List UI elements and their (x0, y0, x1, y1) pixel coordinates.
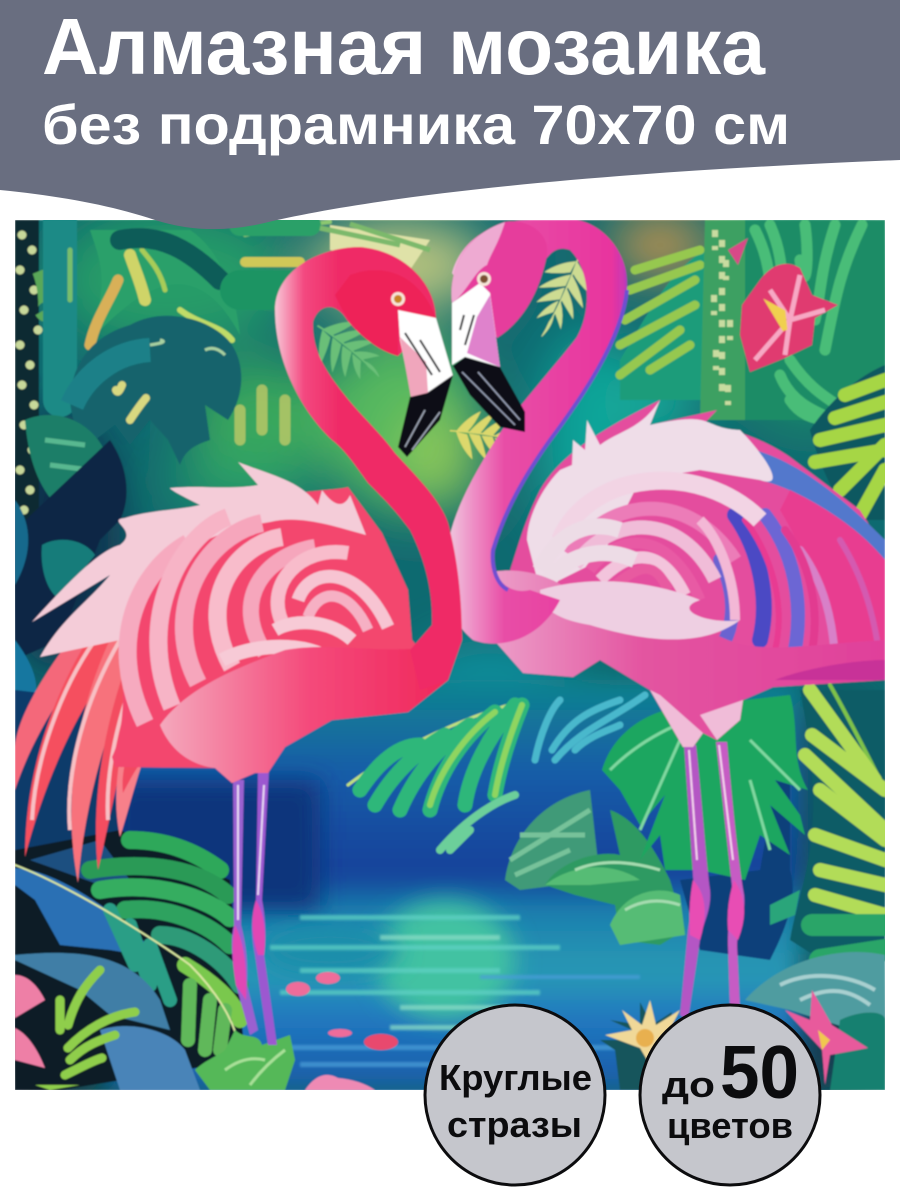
lower left body (160, 640, 462, 783)
right neck (446, 220, 627, 644)
badge: up to 50 colours: 50 (720, 1030, 799, 1114)
left head (335, 270, 436, 356)
mid fronds between necks (316, 258, 588, 460)
badge: up to 50 colours (640, 1005, 820, 1185)
big monstera behind right legs (602, 695, 808, 880)
lime palm, lower right (769, 682, 885, 962)
painting: flamingos in a jungle (0, 210, 900, 1110)
pink flower, bottom right (785, 990, 868, 1085)
top right foliage (620, 220, 885, 520)
purple tail feathers (720, 515, 880, 670)
left flamingo neck and head (275, 247, 462, 690)
centre palm frond (348, 700, 525, 850)
right wing arcs (540, 481, 760, 620)
lower centre leaves (505, 790, 685, 945)
right flamingo legs (680, 742, 744, 1020)
hanging bead vine, left (15, 220, 44, 520)
badge: round rhinestones (425, 1005, 605, 1185)
dark jungle patch, right (680, 780, 793, 960)
blue upper band (755, 450, 885, 560)
wing base (112, 487, 448, 783)
badge: round rhinestones: Круглые (439, 1057, 592, 1098)
left wing arcs (128, 517, 388, 723)
left flamingo tail feathers (15, 640, 142, 884)
title: second line: без подрамника 70х70 см (42, 93, 790, 156)
right flamingo body and wing (496, 399, 885, 748)
top left dark monstera (70, 316, 285, 465)
cream flower (600, 1000, 680, 1090)
right flamingo neck and head (446, 220, 627, 644)
pale upper plumes (32, 462, 366, 657)
left eye (391, 292, 405, 306)
header banner (0, 0, 900, 229)
left beak (398, 310, 453, 457)
left flamingo body and wing (15, 462, 462, 883)
water (110, 680, 800, 1090)
badge: up to 50 colours: до (662, 1064, 715, 1105)
right beak (452, 283, 525, 432)
painted artwork (0, 210, 900, 1110)
pale upper plumes (527, 400, 773, 590)
left flamingo legs (232, 770, 277, 1045)
jungle backdrop colour masses (0, 210, 900, 1110)
teal grey leaf, lower right (745, 952, 885, 1090)
lower right body (496, 569, 884, 708)
badge: up to 50 colours: цветов (667, 1105, 793, 1146)
title: first line: Алмазная мозаика (42, 2, 765, 91)
blue fronds (535, 695, 645, 760)
pink flower, top right (728, 238, 838, 372)
hot pink outer band (780, 489, 885, 644)
left neck (275, 247, 462, 690)
dark left leaves (15, 224, 430, 860)
right flamingo silhouette (503, 400, 885, 747)
right eye (477, 272, 491, 286)
top left big leaf (60, 220, 330, 400)
badge: round rhinestones: стразы (447, 1104, 582, 1145)
right head (451, 221, 547, 338)
bottom left foliage (15, 830, 375, 1090)
water lilies (286, 972, 398, 1050)
